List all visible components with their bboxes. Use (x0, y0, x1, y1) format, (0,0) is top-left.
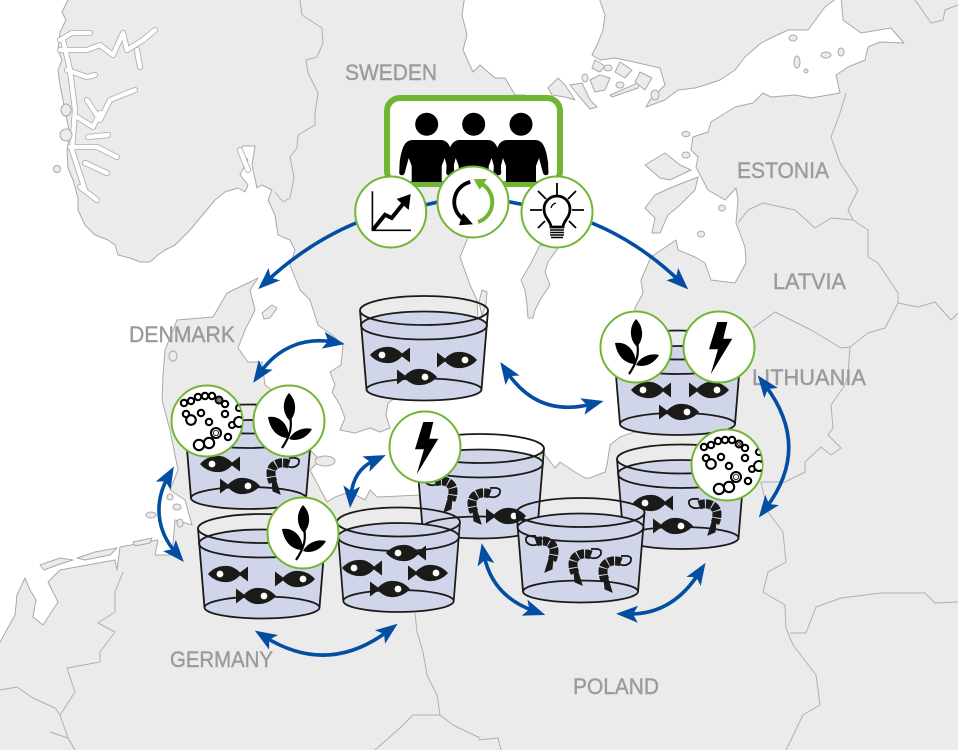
icon: cycle badge (438, 166, 508, 238)
arrow: upper right tank to middle right tank (765, 385, 789, 508)
label: Sweden: SWEDEN (345, 60, 437, 85)
tank: upper right, three fish (614, 330, 742, 435)
badge: energy on centre tank (390, 412, 460, 482)
label: Lithuania: LITHUANIA (752, 365, 866, 390)
arrow: hub to Latvia (592, 223, 680, 281)
tank: lower centre, four fish (337, 508, 460, 612)
tank: lower left, three fish (198, 514, 326, 618)
badge: biofilter bubbles on middle right tank (692, 430, 764, 500)
tank: left, fish and shrimp (184, 404, 312, 509)
arrow: top tank to left tank (260, 341, 333, 373)
tank: centre, shrimp and fish (416, 434, 544, 538)
badge: biofilter bubbles on left tank (172, 386, 244, 456)
label: Latvia: LATVIA (773, 269, 846, 294)
label: Estonia: ESTONIA (737, 158, 829, 183)
badge: energy on upper right tank (684, 312, 754, 382)
arrows: blue exchange flows (159, 201, 789, 655)
arrow: middle right tank to lower tank (628, 573, 699, 614)
arrow: hub to Denmark (267, 223, 356, 281)
label: Germany: GERMANY (170, 647, 273, 672)
tank: top centre, three fish (360, 296, 488, 400)
tank: middle right, fish and shrimp (617, 444, 745, 549)
arrow: lower centre tank to centre tank (351, 460, 375, 496)
label: Poland: POLAND (573, 674, 659, 699)
badge: plant on lower left tank (268, 498, 338, 568)
icon: rising chart badge (355, 176, 426, 248)
map: Norwegian fjords (60, 30, 248, 200)
icon: light bulb badge (522, 176, 592, 248)
label: Denmark: DENMARK (129, 322, 235, 347)
icon: three people (399, 113, 548, 182)
arrow: lower left tank to lower centre tank (265, 631, 388, 655)
arrow: lower tank to centre tank (484, 555, 534, 611)
tank: lower centre right, three shrimp (516, 498, 644, 602)
map: islands (40, 35, 844, 570)
panel: stakeholders group (387, 98, 560, 184)
arrow: left tank to lower left tank (159, 477, 176, 553)
badge: plant on upper right tank (600, 312, 672, 382)
arc link between hub badges (425, 201, 525, 205)
arrow: top tank to upper right tank (507, 372, 592, 407)
badge: plant on left tank (254, 386, 324, 456)
